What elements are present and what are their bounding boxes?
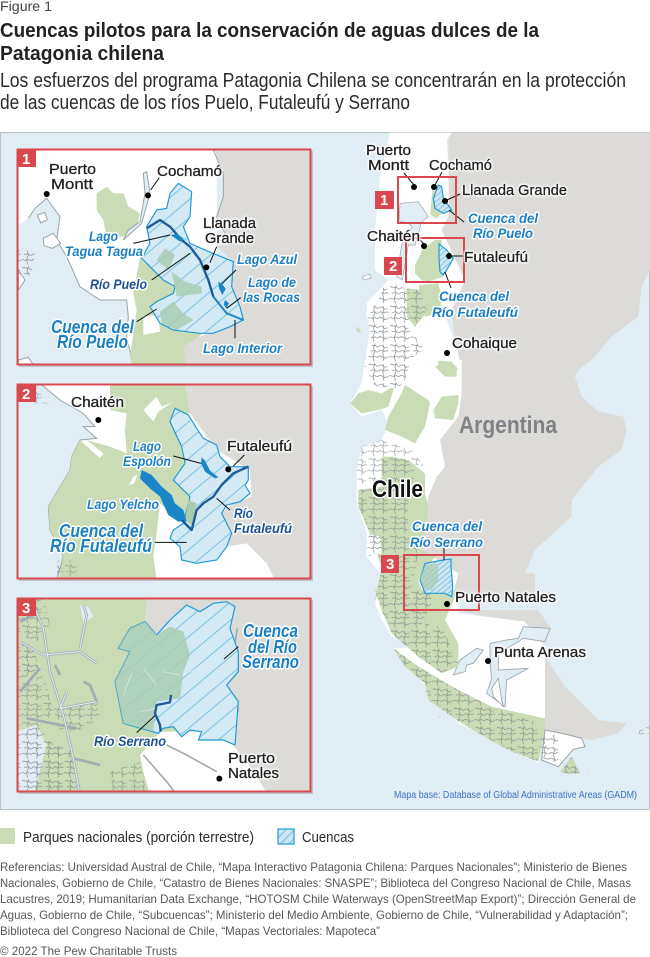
main map: inset locator box 3 bbox=[381, 555, 479, 610]
main map: basin Río Serrano bbox=[420, 559, 453, 597]
main map: inset locator box 2 bbox=[384, 238, 464, 282]
inset 2 map bbox=[34, 386, 310, 578]
subtitle bbox=[0, 70, 626, 114]
inset 2 labels: Lago bbox=[133, 438, 161, 454]
main map: inset locator box 3: 3 bbox=[386, 556, 394, 573]
inset 2 basin label: Río Futaleufú bbox=[50, 536, 152, 556]
inset 1 water labels: las Rocas bbox=[243, 289, 300, 305]
inset 2 labels: Chaitén bbox=[71, 394, 124, 411]
main map: basin Río Puelo and Río Futaleufú bbox=[433, 185, 453, 275]
inset 2 frame bbox=[18, 384, 310, 578]
main map: basin labels: Río Serrano bbox=[410, 534, 483, 550]
inset 1 number: 1 bbox=[22, 151, 30, 168]
inset 3 frame bbox=[18, 598, 310, 792]
inset 1 city labels: Cochamó bbox=[157, 163, 222, 180]
inset 2 basin label bbox=[50, 521, 152, 556]
inset 2 labels: Lago Yelcho bbox=[87, 496, 159, 512]
main map: city dots bbox=[411, 184, 491, 664]
inset 1 water labels: Lago Interior bbox=[203, 340, 283, 356]
references: Referencias: Universidad Austral de Chile, “Mapa Interactivo Patagonia Chilena: Parques Nacionales”; Ministerio de Bienes bbox=[0, 860, 627, 874]
legend: parks label: Parques nacionales (porción terrestre) bbox=[23, 830, 254, 846]
main map: city labels: Cochamó bbox=[429, 157, 492, 174]
country label: Argentina: Argentina bbox=[459, 412, 558, 439]
inset 1 number bbox=[18, 150, 36, 168]
inset 3 basin label: Serrano bbox=[242, 652, 299, 672]
main map: basin labels: Río Futaleufú bbox=[432, 304, 518, 320]
inset 3 map bbox=[17, 597, 313, 795]
main map: city labels: Chaitén bbox=[367, 228, 420, 245]
inset 3 labels: Puerto bbox=[228, 750, 275, 767]
archipelago north bbox=[356, 190, 458, 388]
panel: map background bbox=[0, 132, 650, 810]
main map: city labels bbox=[366, 142, 586, 661]
main map: city labels: Montt bbox=[368, 157, 410, 174]
references: Aguas, Gobierno de Chile, “Subcuencas”; Ministerio del Medio Ambiente, Gobierno de Chile, “Vulnerabilidad y Adaptación”; bbox=[0, 908, 628, 922]
main map: basin labels bbox=[410, 210, 539, 550]
inset 2 number: 2 bbox=[22, 386, 30, 403]
inset 3 labels: Natales bbox=[228, 765, 279, 782]
references: Lacustres, 2019; Humanitarian Data Exchange, “HOTOSM Chile Waterways (OpenStreetMap Export)”; Dirección General de bbox=[0, 892, 636, 906]
inset 1 water labels: Lago de bbox=[248, 274, 296, 290]
subtitle: de las cuencas de los ríos Puelo, Futaleufú y Serrano bbox=[0, 92, 410, 114]
Argentina and Chile land north bbox=[362, 133, 650, 370]
inset 1 water labels: Tagua Tagua bbox=[65, 243, 143, 259]
legend: basin label: Cuencas bbox=[302, 830, 354, 846]
inset 1 city labels: Montt bbox=[51, 176, 94, 193]
inset 3 basin label bbox=[242, 621, 299, 672]
inset 2 labels: Río bbox=[234, 505, 253, 521]
inset 1 map bbox=[17, 147, 313, 370]
inset 3 basin label: del Río bbox=[248, 637, 297, 657]
title bbox=[0, 19, 540, 65]
inset 3 labels: Río Serrano bbox=[94, 733, 166, 749]
inset 1 city labels bbox=[49, 161, 257, 247]
inset 2 labels: Futaleufú bbox=[234, 520, 292, 536]
country label: Chile: Chile bbox=[372, 476, 423, 503]
main map: basin labels: Cuenca del bbox=[468, 210, 539, 226]
panel: inset 3 Río Serrano bbox=[17, 597, 313, 795]
main map: leader lines bbox=[404, 172, 464, 560]
main map: city labels: Cohaique bbox=[452, 335, 517, 352]
river bbox=[155, 695, 171, 732]
main map: basin labels: Cuenca del bbox=[439, 288, 510, 304]
inset 3 number bbox=[18, 599, 36, 617]
main map: city labels: Puerto bbox=[366, 142, 411, 159]
land south bbox=[375, 590, 650, 773]
main map: city labels: Punta Arenas bbox=[494, 644, 586, 661]
inset 2 number bbox=[18, 385, 36, 403]
rivers and lakes bbox=[147, 220, 213, 297]
inset 2 labels: Espolón bbox=[123, 453, 171, 469]
inset 1 city labels: Puerto bbox=[49, 161, 96, 178]
inset 1 water labels: Río Puelo bbox=[90, 276, 147, 292]
legend: parks swatch bbox=[0, 828, 15, 844]
inset 3 number: 3 bbox=[22, 600, 30, 617]
main map: city labels: Futaleufú bbox=[464, 249, 528, 266]
main map: basin labels: Río Puelo bbox=[473, 225, 533, 241]
legend: basin swatch bbox=[278, 829, 294, 844]
inset 1 water labels: Lago Azul bbox=[237, 251, 298, 267]
main map: basin labels: Cuenca del bbox=[412, 518, 483, 534]
legend bbox=[0, 828, 354, 846]
inset 1 basin label bbox=[51, 317, 135, 352]
references: Biblioteca del Congreso Nacional de Chile, “Mapas Vectoriales: Mapoteca” bbox=[0, 924, 380, 938]
lakes and river bbox=[140, 457, 218, 522]
references bbox=[0, 860, 636, 938]
main map: city labels: Puerto Natales bbox=[455, 589, 556, 606]
inset 2 basin label: Cuenca del bbox=[59, 521, 144, 541]
Argentina and Chile land middle bbox=[350, 360, 627, 600]
main map: land masses bbox=[350, 133, 650, 773]
inset 2 labels: Futaleufú bbox=[227, 438, 292, 455]
inset 1 city labels: Llanada bbox=[203, 215, 257, 232]
title: Patagonia chilena bbox=[0, 42, 165, 65]
inset 1 frame bbox=[18, 150, 310, 364]
basin Río Serrano bbox=[115, 602, 238, 745]
basin Río Puelo bbox=[142, 183, 243, 333]
inset 3 labels bbox=[94, 733, 279, 782]
inset 1 water labels bbox=[65, 228, 300, 356]
panel: inset 1 Río Puelo bbox=[17, 147, 313, 370]
main map: inset locator box 1 bbox=[375, 177, 456, 223]
main map: city labels: Llanada Grande bbox=[462, 182, 567, 199]
inset 3 basin label: Cuenca bbox=[243, 621, 298, 641]
basin Río Futaleufú bbox=[170, 408, 250, 563]
main map: inset locator box 1: 1 bbox=[380, 192, 388, 209]
inset 2 labels bbox=[71, 394, 292, 536]
main map: inset locator box 2: 2 bbox=[389, 258, 397, 275]
inset 1 water labels: Lago bbox=[89, 228, 118, 244]
panel: inset 2 Río Futaleufú bbox=[17, 383, 317, 583]
inset 1 basin label: Río Puelo bbox=[57, 332, 128, 352]
title: Cuencas pilotos para la conservación de aguas dulces de la bbox=[0, 19, 540, 42]
inset 1 basin label: Cuenca del bbox=[51, 317, 135, 337]
inset 1 city labels: Grande bbox=[205, 230, 254, 247]
